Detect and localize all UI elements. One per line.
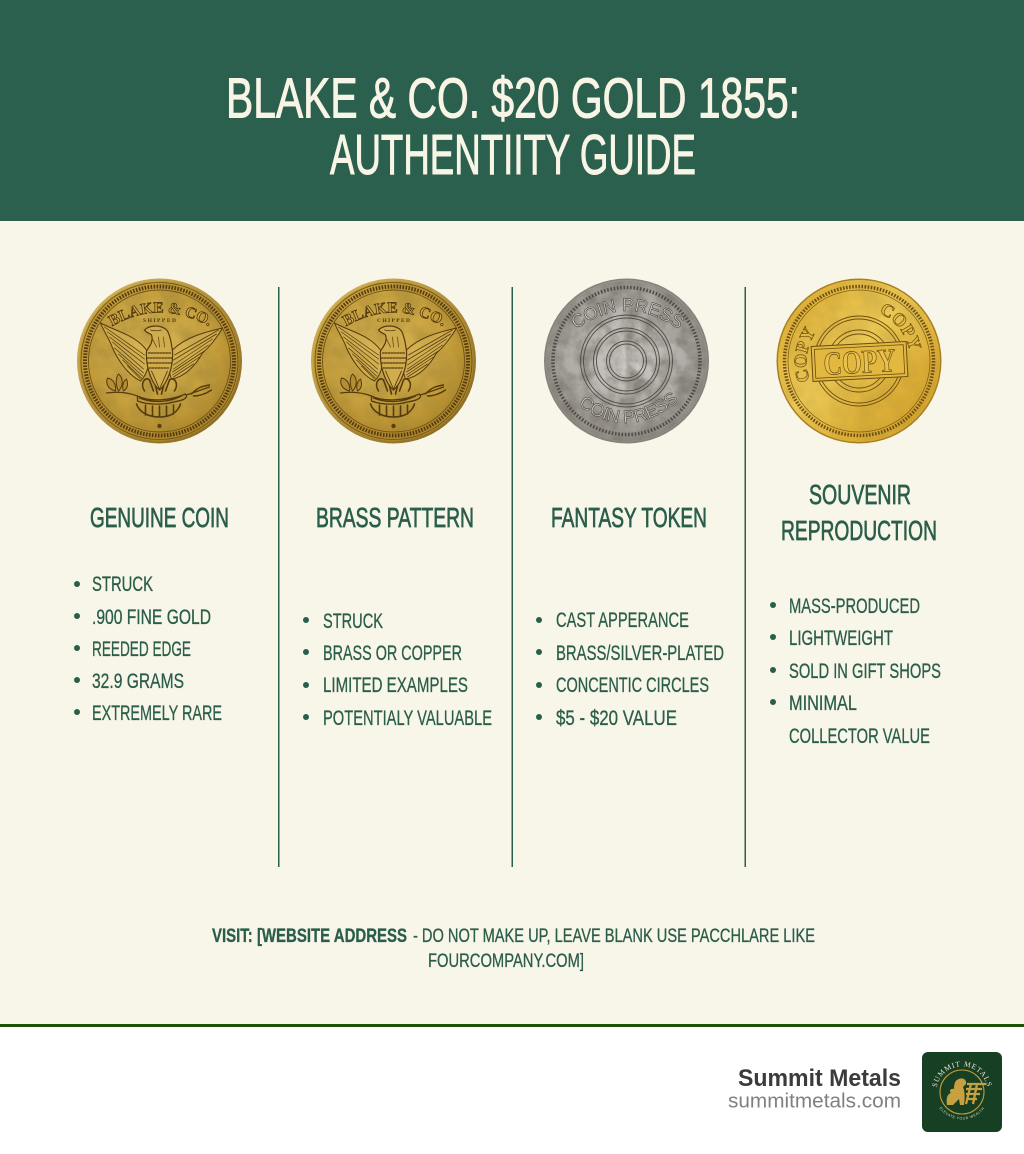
coin: silver fantasy token: COIN PRESS	[572, 298, 684, 328]
coin: silver fantasy token	[544, 278, 709, 444]
logo: SUMMIT METALS	[932, 1061, 992, 1088]
column: fantasy token	[536, 278, 724, 730]
visit note: VISIT: [WEBSITE ADDRESS	[212, 925, 407, 947]
list: brass pattern traits: STRUCK	[323, 609, 383, 633]
visit note	[212, 925, 815, 972]
brand url: summitmetals.com	[728, 1090, 901, 1112]
list: brass pattern traits: LIMITED EXAMPLES	[323, 673, 468, 697]
list: genuine coin traits: 32.9 GRAMS	[92, 669, 184, 693]
list: fantasy token traits: CAST APPERANCE	[556, 608, 689, 632]
list: fantasy token traits: BRASS/SILVER-PLATED	[556, 641, 724, 665]
coin: silver fantasy token: COIN PRESS	[580, 392, 678, 424]
coin: brass pattern eagle: BLAKE & CO.	[341, 302, 444, 327]
list: brass pattern traits: BRASS OR COPPER	[323, 641, 462, 665]
list: genuine coin traits: REEDED EDGE	[92, 637, 191, 661]
coin: gold copy	[776, 278, 942, 444]
coin: gold copy: COPY	[881, 304, 922, 348]
brand name: Summit Metals	[738, 1065, 901, 1092]
list: souvenir reproduction traits	[770, 594, 941, 748]
list: brass pattern traits	[303, 609, 492, 730]
coin: brass pattern eagle	[311, 278, 476, 444]
title: AUTHENTIITY GUIDE	[330, 123, 696, 186]
heading: fantasy token: FANTASY TOKEN	[551, 502, 707, 533]
list: souvenir reproduction traits: MINIMAL	[789, 691, 857, 715]
column: brass pattern	[303, 278, 492, 730]
coin: gold copy: COPY	[823, 343, 897, 383]
coin: brass pattern eagle: CHIPPED	[377, 318, 410, 324]
header banner	[0, 0, 1024, 221]
visit note: - DO NOT MAKE UP, LEAVE BLANK USE PACCHLARE LIKE	[413, 925, 815, 947]
list: genuine coin traits	[74, 572, 222, 725]
list: souvenir reproduction traits: LIGHTWEIGHT	[789, 626, 893, 650]
list: souvenir reproduction traits: COLLECTOR VALUE	[789, 724, 930, 748]
list: fantasy token traits	[536, 608, 724, 730]
list: genuine coin traits: EXTREMELY RARE	[92, 701, 222, 725]
heading: souvenir reproduction: REPRODUCTION	[781, 515, 937, 546]
coin: gold copy: COPY	[794, 326, 815, 382]
heading: souvenir reproduction: SOUVENIR	[809, 479, 911, 510]
visit note: FOURCOMPANY.COM]	[428, 950, 584, 972]
title	[226, 66, 800, 186]
list: genuine coin traits: .900 FINE GOLD	[92, 605, 211, 629]
coin: genuine gold eagle	[77, 278, 242, 444]
list: souvenir reproduction traits: MASS-PRODUCED	[789, 594, 920, 618]
column: souvenir reproduction	[770, 278, 942, 748]
logo	[922, 1052, 1002, 1132]
heading: genuine coin: GENUINE COIN	[90, 502, 229, 533]
heading: souvenir reproduction	[781, 479, 937, 546]
column: genuine coin	[74, 278, 242, 725]
coin: genuine gold eagle: SHIPPED	[143, 318, 176, 324]
column dividers	[278, 287, 746, 867]
footer band	[0, 1024, 1024, 1154]
list: fantasy token traits: CONCENTIC CIRCLES	[556, 673, 709, 697]
heading: brass pattern: BRASS PATTERN	[316, 502, 474, 533]
list: souvenir reproduction traits: SOLD IN GIFT SHOPS	[789, 659, 941, 683]
coin: genuine gold eagle: BLAKE & CO.	[107, 302, 210, 327]
title: BLAKE & CO. $20 GOLD 1855:	[226, 66, 800, 130]
list: brass pattern traits: POTENTIALY VALUABLE	[323, 706, 492, 730]
logo: ELEVATE YOUR WEALTH	[940, 1106, 984, 1120]
list: fantasy token traits: $5 - $20 VALUE	[556, 706, 677, 730]
list: genuine coin traits: STRUCK	[92, 572, 153, 596]
